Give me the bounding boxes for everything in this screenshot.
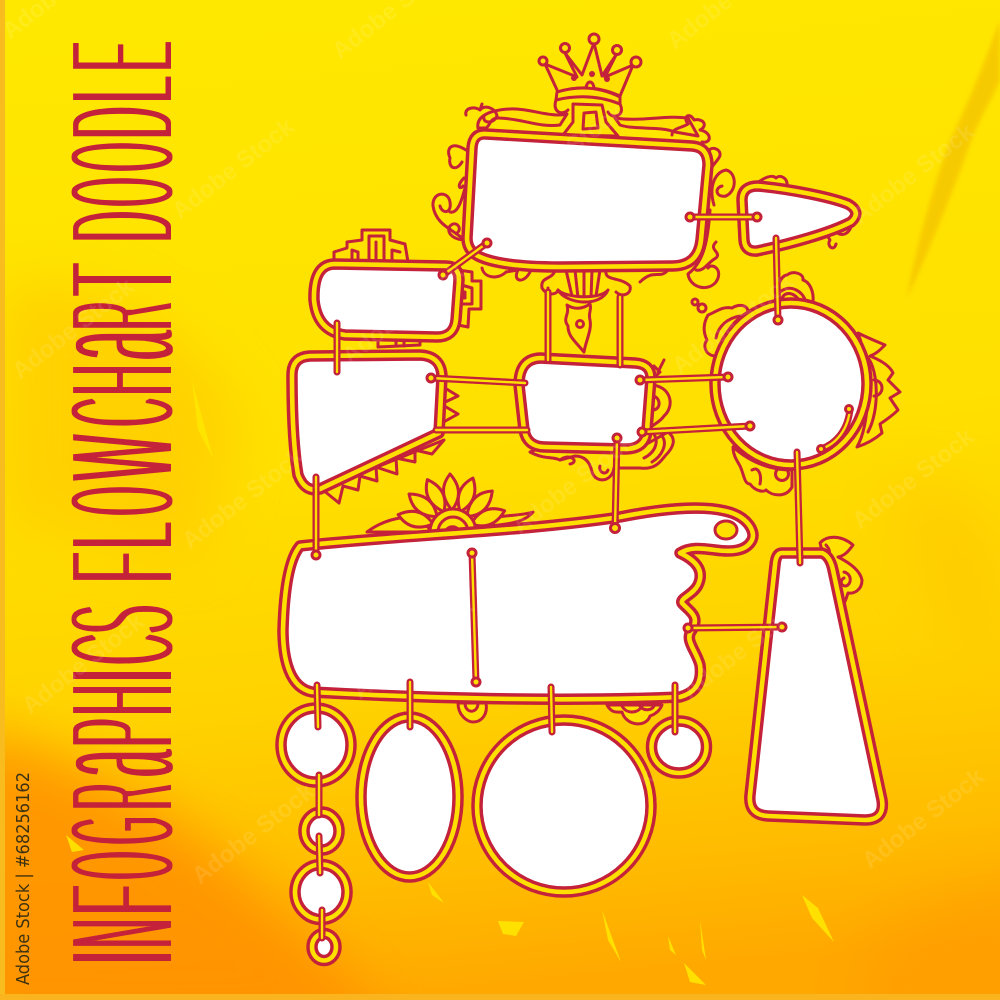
flower ornament xyxy=(367,474,533,532)
title: I xyxy=(37,668,206,683)
watermark: Adobe Stock xyxy=(497,98,630,210)
title: C xyxy=(37,397,206,427)
bunting ornaments on left shape xyxy=(320,385,458,503)
step ornaments on left box xyxy=(334,230,481,347)
title: O xyxy=(37,486,206,516)
title: D xyxy=(37,211,206,242)
title: W xyxy=(37,434,206,480)
big circle ornaments xyxy=(692,273,900,495)
panel: triangle xyxy=(742,186,856,251)
watermark: Adobe Stock xyxy=(667,268,800,380)
panel: bottom circle 4 xyxy=(652,721,706,773)
panel: chain link 1 xyxy=(304,812,339,850)
panel: big circle xyxy=(715,303,867,465)
title: R xyxy=(37,301,206,330)
panel: bottom circle 3 xyxy=(477,720,651,892)
title: I xyxy=(37,950,206,965)
title: F xyxy=(37,552,206,583)
watermark: Adobe Stock xyxy=(527,763,660,875)
icon: fingernail xyxy=(715,521,737,539)
center box ornaments xyxy=(530,360,673,480)
title: H xyxy=(37,364,206,396)
watermark: Adobe Stock xyxy=(847,423,980,535)
watermark: Adobe Stock xyxy=(167,113,300,225)
title: G xyxy=(37,816,206,845)
credit text: Adobe Stock | #68256162 xyxy=(13,772,34,985)
title: R xyxy=(37,783,206,810)
title: O xyxy=(37,851,206,880)
title: C xyxy=(37,633,206,665)
panel: rounded box left xyxy=(314,264,459,337)
watermark: Adobe Stock xyxy=(857,763,990,875)
title xyxy=(4,41,214,965)
icon: crown xyxy=(539,34,641,136)
panel: bottom circle 1 xyxy=(281,708,351,782)
title: P xyxy=(37,718,206,747)
curved marker in circle xyxy=(818,406,852,452)
watermark: Adobe Stock xyxy=(507,428,640,540)
title: N xyxy=(37,919,206,948)
title: L xyxy=(37,76,206,103)
watermark: Adobe Stock xyxy=(17,608,150,720)
watermark: Adobe Stock xyxy=(7,273,140,385)
title: D xyxy=(37,106,206,139)
small triangle ornaments xyxy=(757,176,852,248)
panel: bottom oval 2 xyxy=(361,717,458,877)
connectors xyxy=(312,213,800,938)
watermark: Adobe Stock xyxy=(187,778,320,890)
hand ornaments xyxy=(458,703,662,724)
title: F xyxy=(37,885,206,915)
watermark: Adobe Stock xyxy=(847,118,980,230)
watermark: Adobe Stock xyxy=(677,593,810,705)
title: O xyxy=(37,177,206,207)
panel: chain link 2 xyxy=(295,864,347,920)
frame ornaments xyxy=(433,104,734,352)
panel: crown frame xyxy=(467,134,708,267)
panel: slanted box left xyxy=(292,355,442,490)
watermark: Adobe Stock xyxy=(177,443,310,555)
trapezoid ornament xyxy=(820,537,862,613)
panel: center box xyxy=(519,358,651,449)
title: O xyxy=(37,142,206,172)
title: L xyxy=(37,522,206,549)
panel: pointing hand xyxy=(283,508,753,699)
panel: chain link 3 xyxy=(312,934,336,960)
title: T xyxy=(37,264,206,296)
title: a xyxy=(4,331,214,360)
title: H xyxy=(37,684,206,716)
title: S xyxy=(37,605,206,634)
panel: trapezoid xyxy=(750,553,882,820)
watermark: Adobe Stock xyxy=(337,258,470,370)
title: a xyxy=(4,750,214,777)
watermark: Adobe Stock xyxy=(347,593,480,705)
